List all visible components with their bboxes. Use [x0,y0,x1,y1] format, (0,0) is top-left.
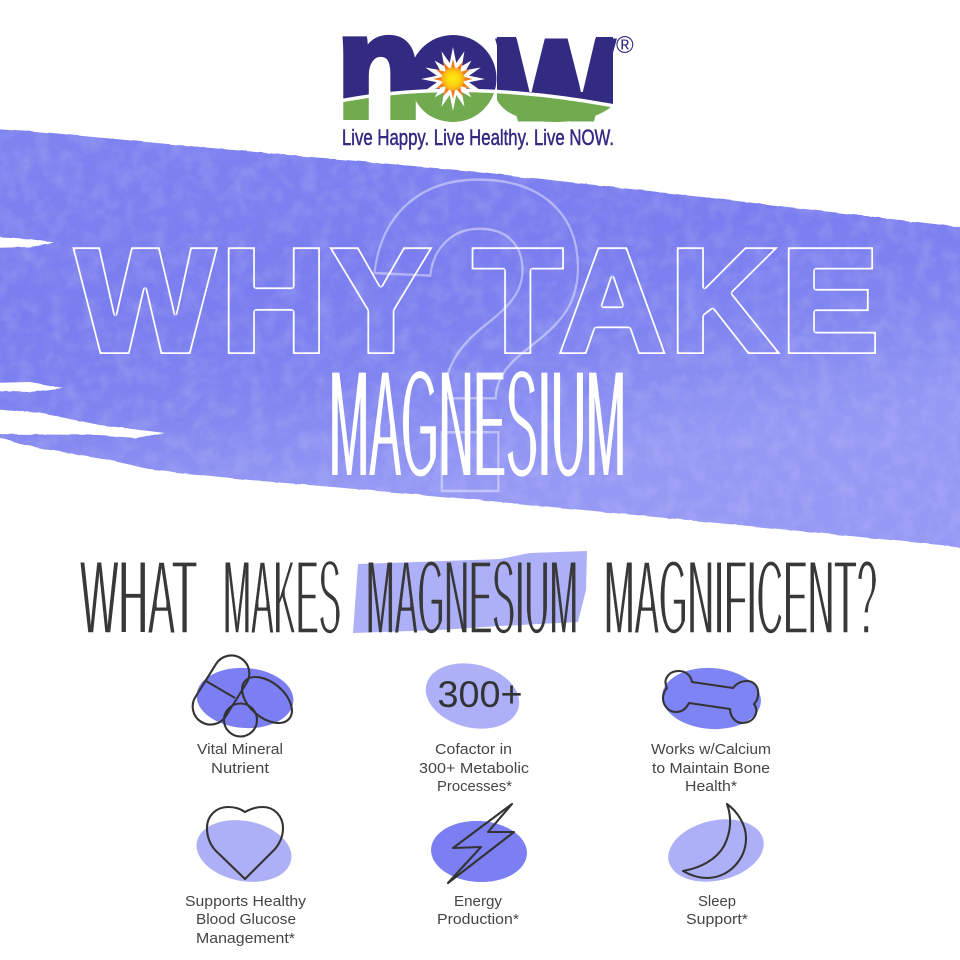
item: cofactor [419,654,529,795]
label [686,894,748,928]
label: Supports Healthy [185,894,307,910]
stat: 300+: 300+ [438,674,522,715]
blob [191,812,297,890]
registered mark: ® [616,32,634,59]
icon: sunburst [421,47,485,111]
item: blood glucose [185,807,307,947]
decorative question mark outline: ? [356,87,601,586]
label: Management* [196,931,295,947]
item: bone health [651,665,771,795]
label: Blood Glucose [196,912,296,928]
icon: pills [186,649,300,736]
icon: heart [207,807,283,879]
label: Sleep [698,894,736,910]
subheading [80,536,877,658]
highlight behind magnesium [353,551,587,633]
heading: WHY TAKE: WHY [76,219,430,383]
label: Vital Mineral [197,742,283,758]
label: Health* [685,779,737,795]
icon: lightning bolt [448,804,514,883]
label: Works w/Calcium [651,742,771,758]
heading: WHY TAKE: TAKE [473,219,879,383]
subheading: WHAT [80,536,197,658]
label [651,742,771,795]
blob [660,665,763,732]
label [437,894,519,928]
panel: watercolor brush stroke [0,128,960,549]
label: to Maintain Bone [652,761,770,777]
logo: NOW [337,0,634,150]
heading: WHY TAKE [76,219,879,383]
label [197,742,283,777]
label: 300+ Metabolic [419,761,529,777]
label [419,742,529,795]
item: vital mineral nutrient [186,649,300,777]
label: Cofactor in [435,742,512,758]
blob [419,654,526,738]
icon: crescent moon [683,804,746,878]
label: Nutrient [211,761,269,777]
tagline: Live Happy. Live Healthy. Live NOW. [342,125,614,150]
label: Energy [454,894,503,910]
logo letters [337,0,616,148]
label [185,894,307,947]
item: energy [429,804,529,928]
subheading: MAKES [223,536,341,658]
label: Production* [437,912,519,928]
logo letters: W [497,15,616,145]
blob [195,665,295,731]
icon: bone [663,671,758,723]
blob [662,810,770,891]
blob [429,819,529,884]
item: sleep [662,804,770,928]
label: Support* [686,912,748,928]
label: Processes* [437,779,512,795]
logo letters: O [408,15,498,145]
